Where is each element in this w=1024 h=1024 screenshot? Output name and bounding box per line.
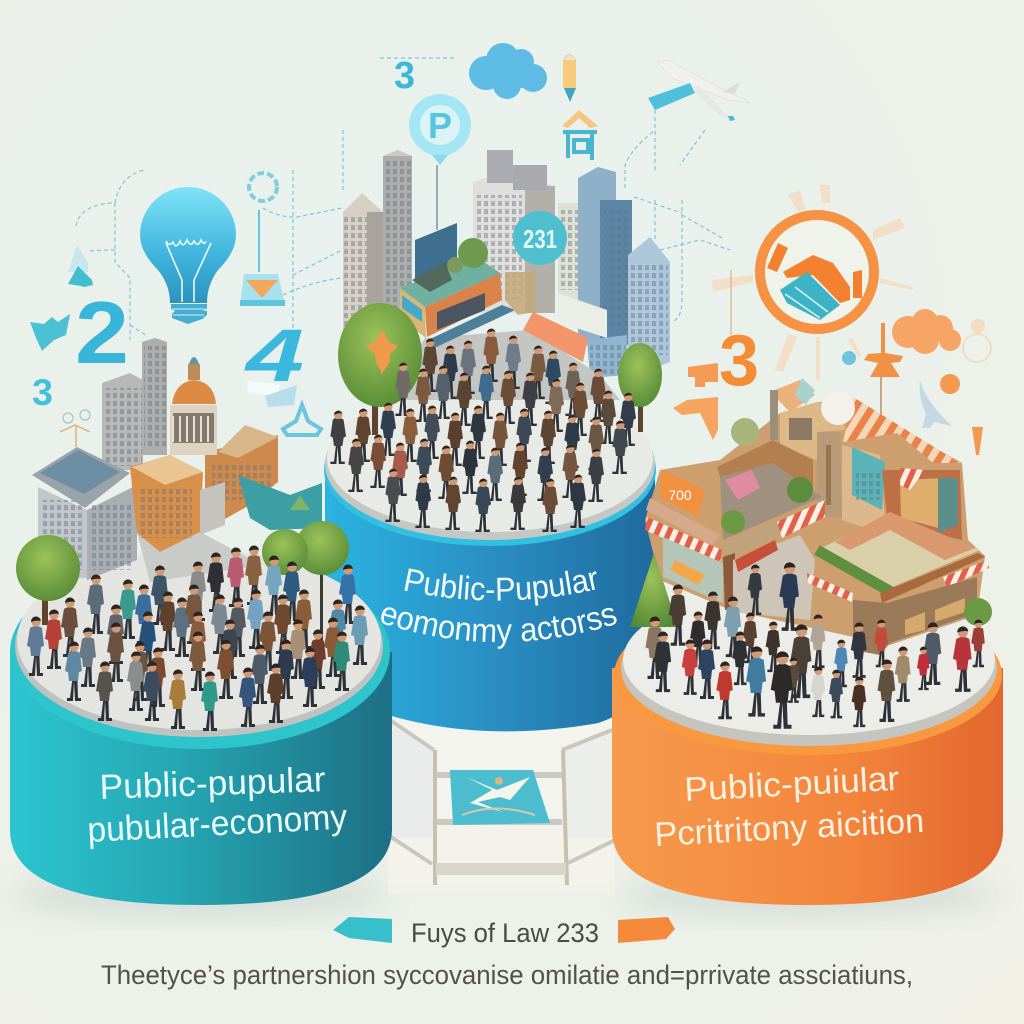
- plate rim: [10, 555, 390, 749]
- crowd middle: [330, 328, 636, 532]
- tree left of plate: [630, 553, 678, 627]
- icon: orange cloud: [892, 309, 961, 354]
- number 4: [243, 314, 304, 407]
- text: middle label: eomonmy actorss: [381, 607, 617, 649]
- icon: feather: [920, 380, 952, 428]
- icon: pencil: [563, 54, 576, 102]
- skyscrapers: [343, 150, 670, 378]
- tree left: [16, 535, 80, 625]
- icon: dot and cross: [842, 319, 991, 432]
- number 3 orange: [719, 270, 759, 401]
- icon: star card: [240, 210, 285, 306]
- cylinder body: [10, 652, 392, 905]
- number 4: 4: [243, 314, 304, 397]
- cylinder body: [325, 470, 655, 737]
- plaza: [385, 330, 620, 400]
- soft shadows: [10, 873, 1000, 917]
- bubble 231: 231: [523, 224, 557, 254]
- text: left label: Public-pupular: [99, 760, 326, 807]
- crowd right: [645, 562, 985, 729]
- text: right label: Public-puiular: [683, 760, 900, 809]
- market building: [645, 378, 992, 655]
- number 3 small: 3: [32, 372, 53, 413]
- panel: left cylinder: [10, 338, 392, 905]
- crowd left: [27, 545, 368, 731]
- towers: [102, 338, 167, 470]
- dashed connector lines: [76, 58, 730, 365]
- caption: Theetyce’s partnershion syccovanise omilatie and=prrivate assciatiuns,: [101, 960, 913, 990]
- icon: flag: [450, 770, 550, 825]
- text: left label: pubular-economy: [86, 797, 349, 850]
- steps: [388, 715, 615, 895]
- legend row: [333, 917, 675, 948]
- icon: airplane: [648, 60, 750, 121]
- panel: middle cylinder: [324, 150, 670, 732]
- steps and flag: [388, 715, 615, 895]
- plate rim: [324, 394, 656, 546]
- icon: light bulb: [140, 187, 236, 324]
- icon: gate: [562, 110, 598, 160]
- tree left: [338, 303, 422, 435]
- number 2: 2: [75, 283, 129, 382]
- cylinder body: [612, 668, 1003, 905]
- bubble 231: [513, 211, 567, 265]
- plate top: [623, 585, 995, 735]
- icon: balloon P: [409, 94, 471, 230]
- numbers and small icons, left: [30, 173, 321, 447]
- text: middle label: [381, 568, 617, 649]
- plate rim: [614, 595, 1002, 755]
- arrow: teal: [333, 917, 392, 943]
- icon: gear: [249, 173, 277, 201]
- market building: 700: [668, 487, 692, 503]
- tree right: [262, 521, 349, 655]
- capitol: [32, 357, 322, 582]
- icon: small triangle: [283, 405, 321, 435]
- top icons: [394, 43, 750, 230]
- text: middle label: Public-Pupular: [404, 568, 596, 606]
- icon: balloon P: P: [428, 105, 452, 146]
- icon: crown: [30, 314, 70, 351]
- number 3 top: 3: [394, 55, 415, 97]
- handshake icon: [712, 185, 913, 380]
- icon: small cone: [972, 427, 983, 455]
- number 3 orange: 3: [719, 321, 759, 401]
- tree right: [618, 343, 662, 432]
- legend heading: Fuys of Law 233: [411, 918, 599, 948]
- icon: cross sign: [60, 410, 90, 447]
- plate top: [17, 550, 381, 730]
- text: right label: [653, 760, 925, 854]
- arrow: orange: [618, 917, 675, 943]
- icon: arrow house: [68, 245, 93, 287]
- text: right label: Pcritritony aicition: [653, 802, 925, 854]
- plate top: [327, 384, 653, 532]
- text: left label: [86, 760, 349, 850]
- panel: right cylinder: [612, 185, 1003, 905]
- orange billboard: [523, 312, 588, 362]
- icon: orange blocks: [673, 363, 718, 440]
- orange building: [400, 238, 535, 350]
- icon: blue cloud: [469, 43, 547, 99]
